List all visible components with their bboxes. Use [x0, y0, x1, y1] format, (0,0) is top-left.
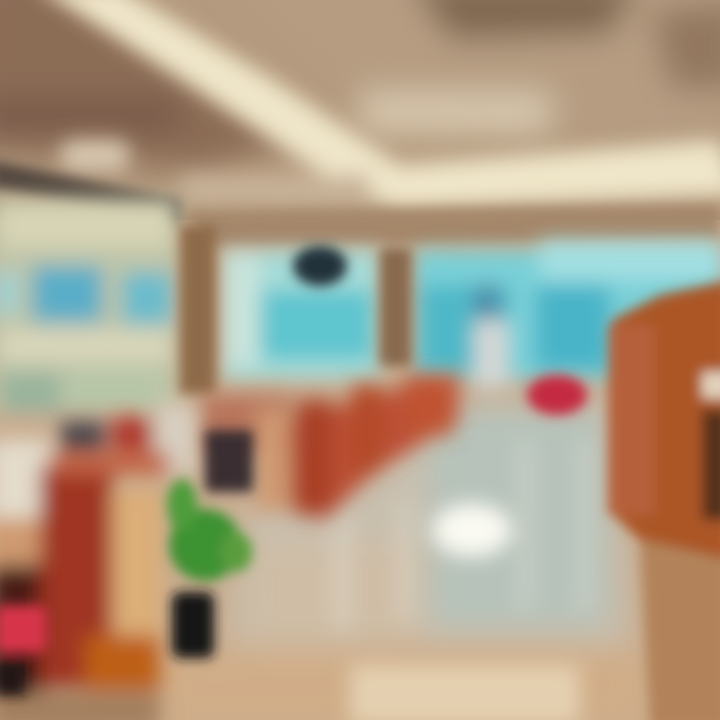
left foreground table and red seating	[0, 405, 195, 720]
right wood partition	[608, 280, 720, 720]
pink seat cushion	[0, 605, 47, 695]
floor streaks	[330, 440, 593, 630]
row of red chairs	[200, 372, 458, 518]
right window	[414, 240, 720, 390]
beam across the windows	[0, 160, 720, 247]
columns	[180, 225, 411, 395]
green plant	[167, 479, 252, 581]
floor reflection	[350, 503, 580, 720]
red chair at window	[527, 375, 587, 415]
floor	[150, 400, 650, 720]
hanging dark screen	[293, 246, 347, 286]
middle window	[222, 250, 380, 380]
ceiling	[0, 0, 720, 220]
dark monitor	[205, 430, 253, 492]
left window	[0, 198, 178, 412]
ceiling light beam	[35, 0, 720, 208]
dark plant pot	[172, 592, 214, 658]
